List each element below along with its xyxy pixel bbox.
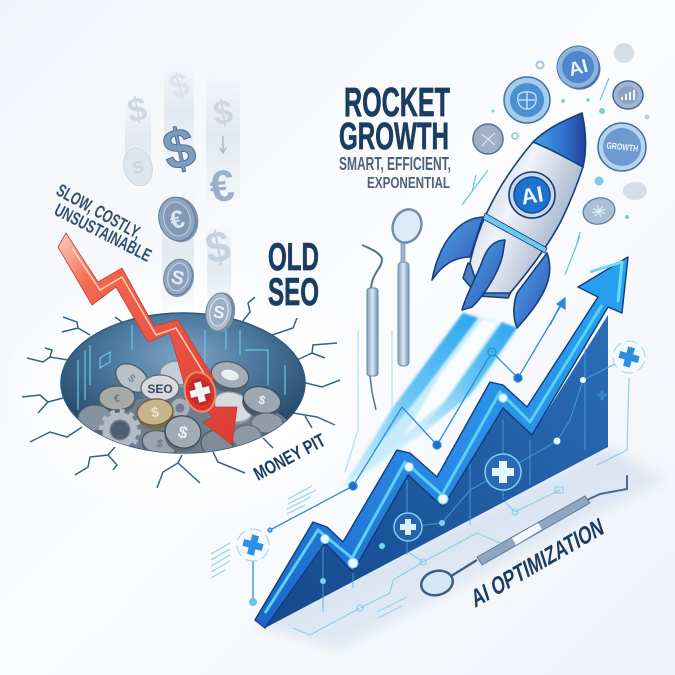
coin: right top	[210, 360, 250, 393]
icon: faint dollar top: $	[165, 65, 193, 107]
panel: falling money	[120, 64, 240, 310]
icon: faint coin: S	[130, 157, 146, 178]
coin: silver dollar front: $	[176, 422, 190, 443]
sparkle dots	[492, 62, 650, 219]
circuit line upper	[249, 298, 565, 606]
panel: ai optimization growth chart	[211, 257, 649, 635]
coin pile	[78, 360, 286, 453]
icon: dollar symbol lower: $	[202, 221, 234, 274]
coin: lower far left	[78, 405, 112, 435]
coin: AI	[552, 41, 605, 95]
icon: rocket	[432, 113, 586, 328]
panel: ai coins	[462, 41, 650, 325]
text block: slow costly unsustainable: SLOW, COSTLY,	[53, 180, 145, 243]
coin: center light	[215, 392, 252, 424]
arrow: red downward trend	[58, 233, 237, 445]
center fin	[462, 240, 505, 310]
ribbon highlight	[265, 262, 622, 613]
cracks	[22, 297, 340, 488]
chart wall	[265, 315, 608, 628]
coin: faint lower	[623, 182, 647, 200]
coin: AI: AI	[566, 56, 590, 81]
coin: lower right	[251, 413, 283, 436]
coin: small gear	[173, 401, 187, 415]
heading: old seo: SEO	[268, 271, 319, 314]
coin: bottom center	[142, 430, 176, 453]
label: ai optimization: AI OPTIMIZATION	[468, 513, 607, 614]
coin: left tilted	[114, 363, 148, 394]
faint list lines	[211, 486, 407, 618]
coin: bottom center right	[200, 430, 234, 452]
pit interior circuits	[78, 325, 285, 410]
icon: euro coin: €	[167, 205, 188, 235]
coin: network	[473, 124, 503, 154]
coin: snowflake	[580, 194, 618, 228]
icon: small down arrow	[220, 136, 226, 153]
heading: rocket growth: ROCKET	[344, 79, 450, 125]
icon: bold dollar: $	[157, 114, 201, 183]
porthole AI	[509, 172, 555, 218]
icon: medical cross badge	[180, 369, 220, 415]
coin: right: $	[257, 392, 267, 408]
flame trail	[343, 313, 517, 488]
faded money streaks	[125, 64, 240, 310]
coin: graph	[613, 81, 643, 109]
subtitle	[339, 154, 451, 192]
icon: faint dollar right: $	[211, 93, 235, 133]
motion arrows	[462, 78, 609, 325]
icon: dental mirror lying	[418, 475, 627, 599]
coin: faint top	[614, 43, 634, 63]
porthole AI: AI	[519, 181, 545, 210]
coin: gold: $	[150, 404, 160, 420]
coin: gold	[136, 398, 174, 429]
icon: faint coin	[120, 145, 156, 189]
coin: mid left	[99, 386, 135, 414]
ground shadow under chart	[255, 447, 665, 650]
icon: dental probe upright	[362, 245, 382, 410]
coin: growth	[598, 123, 646, 171]
left fin	[432, 217, 483, 280]
coin: growth: GROWTH	[606, 140, 639, 154]
coin: silver dollar front	[164, 415, 202, 452]
icon: cross badge right	[609, 337, 649, 377]
heading: rocket growth	[339, 79, 451, 192]
ribbon arrow	[255, 257, 628, 628]
coin: bottom right	[233, 424, 262, 446]
right fin	[514, 253, 550, 328]
heading: old seo	[268, 236, 319, 314]
icon: plus circle large	[485, 454, 521, 490]
heading: old seo: OLD	[268, 236, 319, 279]
icon: cross badge left	[233, 525, 273, 565]
coin: mid left: €	[114, 393, 120, 405]
icon: faint dollar left: $	[125, 90, 150, 130]
text block: slow costly unsustainable: UNSUSTAINABLE	[51, 200, 155, 266]
icon: falling S coin at pit rim	[203, 290, 238, 334]
subtitle: EXPONENTIAL	[367, 175, 450, 192]
icon: S coin	[159, 256, 198, 300]
coin: bottom center: $	[155, 437, 164, 451]
coin: right	[242, 386, 282, 416]
panel: dental tools upright	[345, 205, 426, 472]
coin: left tilted: $	[125, 372, 137, 385]
chart nodes	[320, 377, 586, 584]
rocket body	[470, 142, 583, 293]
body band	[483, 213, 547, 253]
icon: plus circle small	[394, 513, 422, 541]
icon: euro symbol: €	[207, 161, 237, 212]
tool glow lines	[345, 330, 392, 472]
pit opening	[61, 313, 305, 453]
coin: brain	[504, 77, 550, 123]
icon: S coin: S	[169, 267, 186, 290]
subtitle: SMART, EFFICIENT,	[339, 154, 451, 174]
coin: seo	[141, 375, 179, 405]
wall grid lines	[323, 345, 629, 612]
rocket nose	[533, 113, 586, 167]
coin: seo: SEO	[147, 382, 173, 396]
rocket base	[463, 263, 512, 298]
icon: dental mirror upright	[388, 205, 426, 366]
circuit line ground	[293, 378, 629, 635]
icon: gear	[101, 411, 139, 449]
label: money pit: MONEY PIT	[250, 430, 329, 485]
coin: back center	[160, 360, 184, 388]
icon: euro coin	[154, 192, 203, 247]
panel: money pit hole	[22, 297, 340, 488]
heading: rocket growth: GROWTH	[339, 116, 449, 158]
icon: falling S coin at pit rim: S	[212, 302, 226, 323]
